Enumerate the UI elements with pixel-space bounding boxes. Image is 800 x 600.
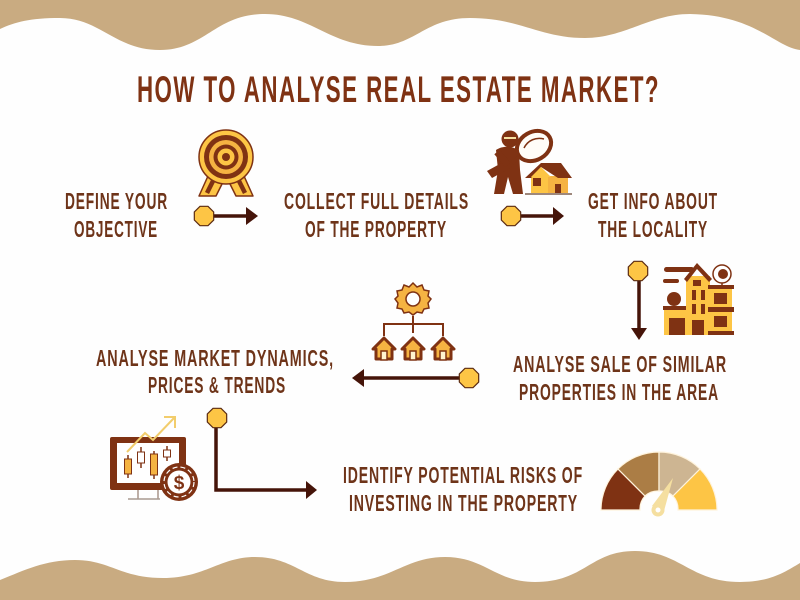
bottom wave banner — [0, 551, 800, 600]
step 2 text: collect full details: COLLECT FULL DETAILS — [284, 188, 469, 214]
top wave banner — [0, 0, 800, 50]
step 2 text: collect full details: OF THE PROPERTY — [305, 216, 447, 242]
step 6 text: identify risks: INVESTING IN THE PROPERTY — [349, 490, 578, 516]
icon: buildings — [663, 263, 734, 335]
icon: gear and houses network — [373, 283, 454, 360]
arrow 1 — [190, 202, 258, 230]
icon: detective with magnifier and house — [487, 125, 572, 194]
icon: archery target — [199, 130, 253, 196]
icon: trading monitor with coin — [110, 417, 198, 501]
step 1 text: define your objective — [65, 188, 168, 242]
step 1 text: define your objective: DEFINE YOUR — [65, 188, 168, 214]
step 3 text: locality — [588, 188, 718, 242]
step 5 text: market dynamics: ANALYSE MARKET DYNAMICS, — [96, 345, 334, 371]
arrow 5 — [203, 404, 317, 499]
arrow 2 — [497, 202, 564, 230]
arrow 3 — [624, 257, 652, 340]
step 3 text: locality: THE LOCALITY — [598, 216, 708, 242]
step 6 text: identify risks: IDENTIFY POTENTIAL RISKS OF — [343, 462, 583, 488]
icon: risk gauge — [601, 452, 717, 516]
step 5 text: market dynamics — [96, 345, 334, 398]
icon: trading monitor with coin: $ — [174, 473, 185, 494]
step 4 text: analyse sale — [513, 351, 727, 405]
step 6 text: identify risks — [343, 462, 583, 516]
step 3 text: locality: GET INFO ABOUT — [588, 188, 718, 214]
step 1 text: define your objective: OBJECTIVE — [74, 216, 158, 242]
step 5 text: market dynamics: PRICES & TRENDS — [148, 372, 286, 398]
step 2 text: collect full details — [284, 188, 469, 242]
arrow 4 — [352, 364, 483, 392]
